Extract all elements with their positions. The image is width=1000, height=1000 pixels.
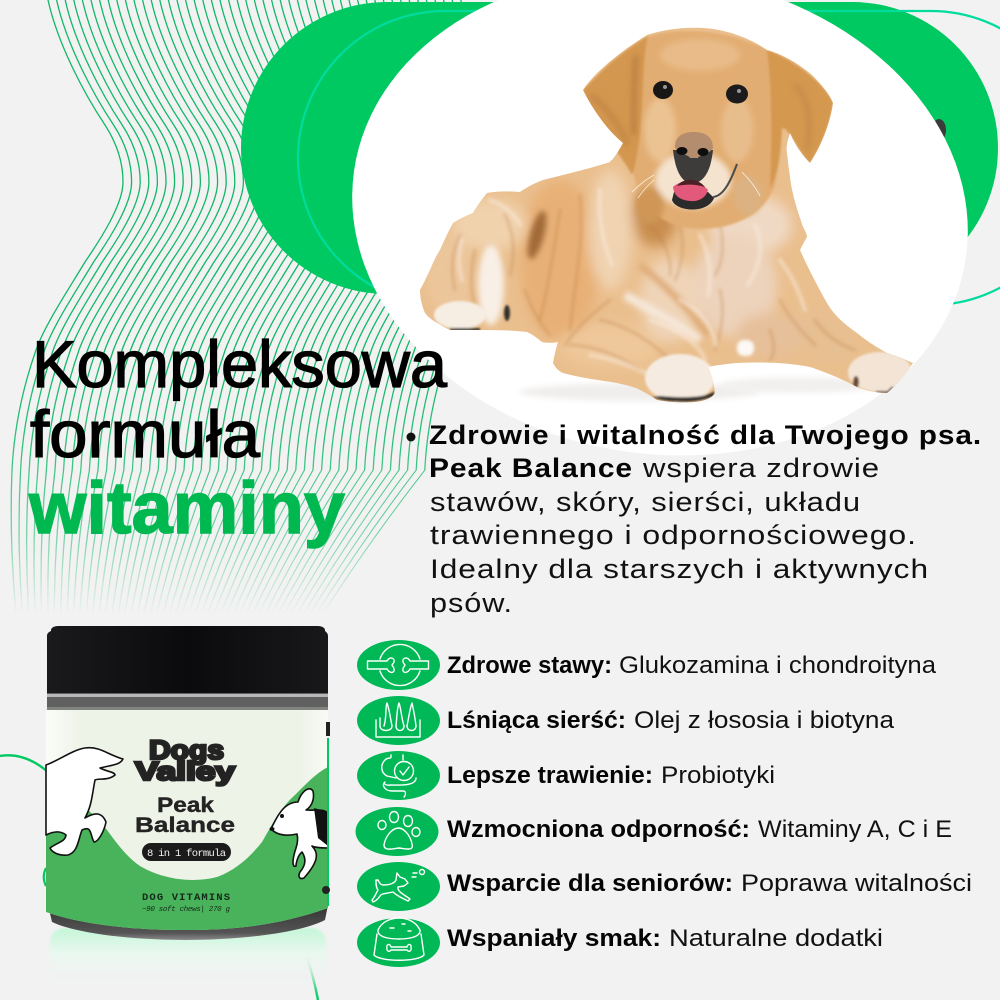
jar lid [47, 626, 328, 695]
heading: Kompleksowa [32, 327, 447, 401]
feature: Lepsze trawienie [357, 751, 775, 800]
dog head [583, 31, 833, 229]
text block: description: wspiera zdrowie [642, 453, 880, 483]
feature: Wsparcie dla seniorów [357, 862, 972, 911]
text block: description: Zdrowie i witalność dla Twojego psa. [429, 420, 982, 450]
text block: description: stawów, skóry, sierści, układu [430, 487, 861, 517]
label right dog [270, 789, 328, 879]
feature: Wsparcie dla seniorów: Poprawa witalności [741, 870, 972, 897]
label: formula pill: 8 in 1 formula [147, 848, 226, 860]
white circle [321, 0, 999, 495]
label: formula pill [142, 843, 231, 861]
jar label [46, 710, 328, 930]
jar glass base [48, 905, 328, 940]
text block: description: trawiennego i odpornościowego. [430, 520, 917, 550]
label logo: Dogs Valley: Valley [135, 756, 236, 786]
feature: Wspaniały smak: Naturalne dodatki [669, 925, 883, 952]
heading: witaminy [28, 468, 345, 549]
teal outline [298, 11, 1000, 305]
feature: Zdrowe stawy: Zdrowe stawy: [447, 652, 612, 679]
dark spot behind circle [932, 119, 946, 141]
jar neck [47, 693, 328, 711]
label side details [322, 722, 330, 906]
text block: description: Peak Balance [429, 453, 633, 483]
feature: Wspaniały smak [357, 918, 883, 967]
green rounded backdrop [241, 2, 998, 294]
feature: Wspaniały smak: Wspaniały smak: [447, 925, 661, 952]
feature: Lśniąca sierść: Olej z łososia i biotyna [634, 707, 895, 734]
label: vitamins text [142, 892, 230, 914]
label: product name [135, 794, 235, 837]
wavy line pattern [10, 0, 462, 610]
label: vitamins text: ~90 soft chews| 270 g [142, 906, 230, 914]
label logo: Dogs Valley [135, 735, 236, 786]
label: vitamins text: DOG VITAMINS [142, 892, 230, 904]
heading [28, 327, 447, 549]
dog fur strokes [452, 190, 855, 375]
icon: hair follicles [376, 703, 420, 737]
feature: Wzmocniona odporność: Witaminy A, C i E [758, 816, 952, 843]
dog body shading [425, 168, 802, 364]
feature: Zdrowe stawy: Glukozamina i chondroityna [619, 652, 937, 679]
label logo: Dogs Valley: Dogs [149, 735, 224, 765]
feature: Lśniąca sierść [357, 696, 895, 745]
text block: description: psów. [430, 588, 513, 618]
icon: paw [378, 812, 420, 849]
label: product name: Balance [135, 814, 235, 837]
product jar [46, 626, 330, 940]
heading: formuła [30, 397, 260, 471]
feature: Wzmocniona odporność: Wzmocniona odporność: [447, 816, 750, 843]
feature: Lepsze trawienie: Probiotyki [661, 762, 775, 789]
icon: running dog [372, 870, 424, 902]
dog face [632, 81, 760, 210]
text block: description: Idealny dla starszych i aktywnych [430, 554, 929, 584]
feature: Zdrowe stawy [357, 640, 937, 690]
feature: Wsparcie dla seniorów: Wsparcie dla seniorów: [447, 870, 733, 897]
jar reflection glow [50, 928, 326, 990]
label left dog [46, 748, 123, 855]
icon: intestine with check [382, 755, 416, 797]
dog paws [434, 301, 912, 402]
label green wave [46, 767, 328, 930]
feature list [356, 640, 972, 967]
feature: Wzmocniona odporność [356, 807, 952, 856]
feature: Lepsze trawienie: Lepsze trawienie: [447, 762, 653, 789]
icon: joint bones [368, 644, 428, 686]
photo: golden retriever [410, 20, 920, 410]
feature: Lśniąca sierść: Lśniąca sierść: [447, 707, 626, 734]
label: product name: Peak [157, 794, 214, 817]
text block: description [406, 420, 982, 618]
green arcs around jar [0, 755, 318, 1000]
icon: food bowl with bone [374, 918, 424, 960]
